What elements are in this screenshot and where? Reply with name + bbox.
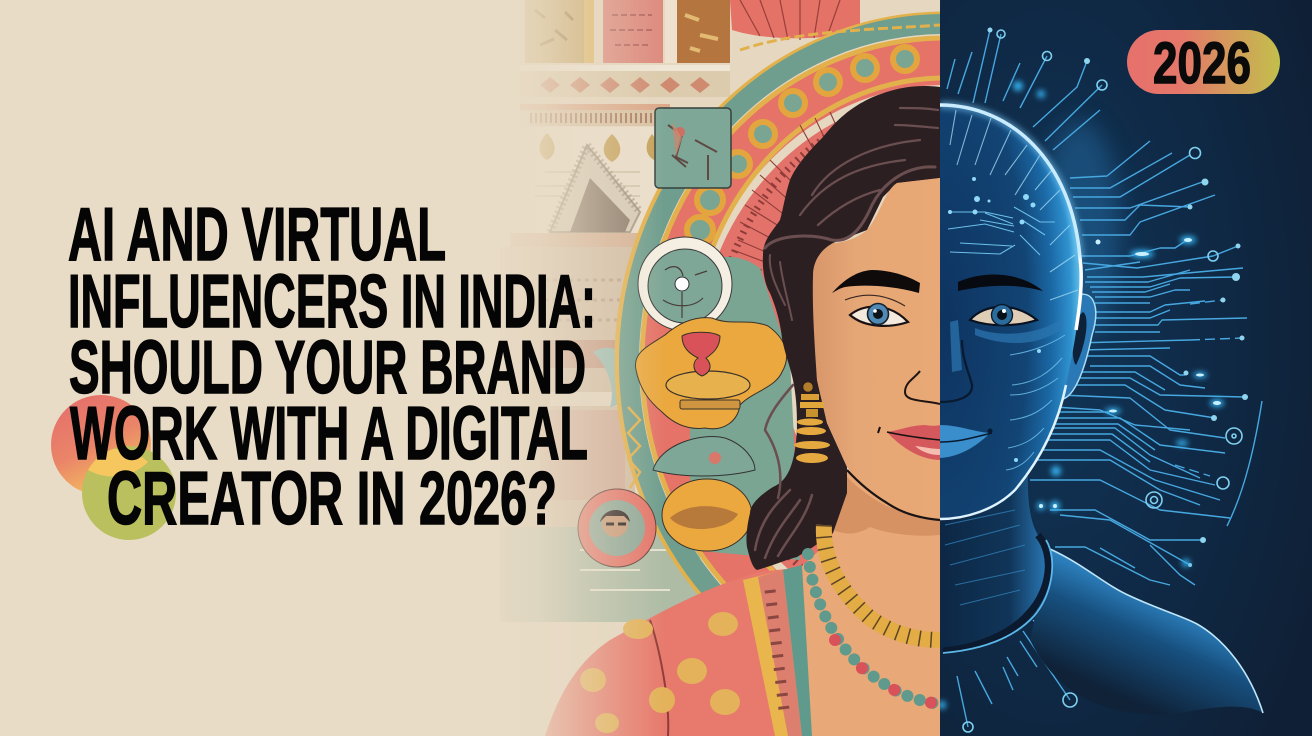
top coral fan (730, 0, 860, 40)
white plate ornament (638, 237, 732, 331)
neck lines (945, 510, 1025, 605)
jaw outline (847, 470, 940, 520)
jaw rim (940, 385, 1066, 519)
hair strands (755, 108, 938, 558)
ornamental arch rings (614, 12, 940, 594)
faded teal bird (593, 348, 617, 407)
hair mass (746, 86, 940, 570)
coral medallion portrait (578, 489, 656, 567)
neck and chest skin (802, 470, 945, 736)
title: SHOULD YOUR BRAND (69, 325, 586, 409)
decorative coral circle (51, 395, 151, 495)
earring (794, 382, 830, 463)
title: WORK WITH A DIGITAL (70, 391, 588, 475)
title: INFLUENCERS IN INDIA: (68, 259, 596, 343)
rim glow (940, 105, 1080, 258)
robot lips (940, 425, 992, 458)
title (68, 192, 596, 540)
robot head (940, 105, 1081, 519)
robot eyebrow (958, 275, 1043, 291)
ring ornaments on arch (687, 47, 917, 243)
title: CREATOR IN 2026? (107, 456, 557, 540)
beaded necklace (808, 554, 940, 704)
woman face (813, 178, 940, 520)
neck (940, 470, 1047, 650)
woman eye (845, 295, 908, 326)
woman eyebrow (832, 270, 920, 293)
coral arch ray detail (733, 112, 836, 270)
circuit lines (947, 30, 1262, 727)
collar (943, 535, 1048, 651)
forehead radial lines (950, 110, 1078, 300)
forehead circuit (948, 207, 1055, 255)
shoulder (1030, 549, 1263, 715)
zigzag arch band (628, 407, 640, 488)
title: AI AND VIRTUAL (68, 192, 446, 276)
shoulder rim (1050, 549, 1263, 713)
teal dome ornament (653, 437, 755, 476)
collar glow (943, 540, 1052, 653)
woman nose (905, 371, 940, 404)
forehead dots (948, 177, 1041, 462)
panel: illustrated woman half (517, 0, 940, 736)
woman lips (878, 425, 940, 460)
circuit nodes (963, 30, 1242, 732)
solid circuit dots (988, 28, 1248, 567)
yellow food ornament (662, 479, 752, 551)
yellow vessel ornament (635, 318, 787, 429)
robot nose (940, 340, 972, 402)
ear skin (816, 376, 818, 384)
panel: digital AI half (938, 0, 1312, 736)
left fade overlay (470, 0, 665, 736)
under-eye highlight (950, 318, 1062, 372)
faded ornamental backdrop (517, 0, 730, 622)
head glow (1040, 120, 1120, 340)
decorative green circle (82, 446, 176, 540)
teal square ornament (655, 108, 731, 188)
cheek lines (1006, 335, 1065, 470)
robot eye (970, 304, 1037, 326)
head details (948, 110, 1078, 470)
head white rim (940, 105, 1081, 330)
ear (1058, 294, 1096, 399)
year badge: 2026 (1153, 31, 1251, 96)
dark navy background (940, 0, 1312, 736)
glowing sparks (938, 81, 1224, 709)
sari and blouse (545, 565, 820, 736)
gold necklace (824, 525, 940, 640)
neck shadow (833, 477, 940, 536)
teal inner field (690, 257, 800, 560)
